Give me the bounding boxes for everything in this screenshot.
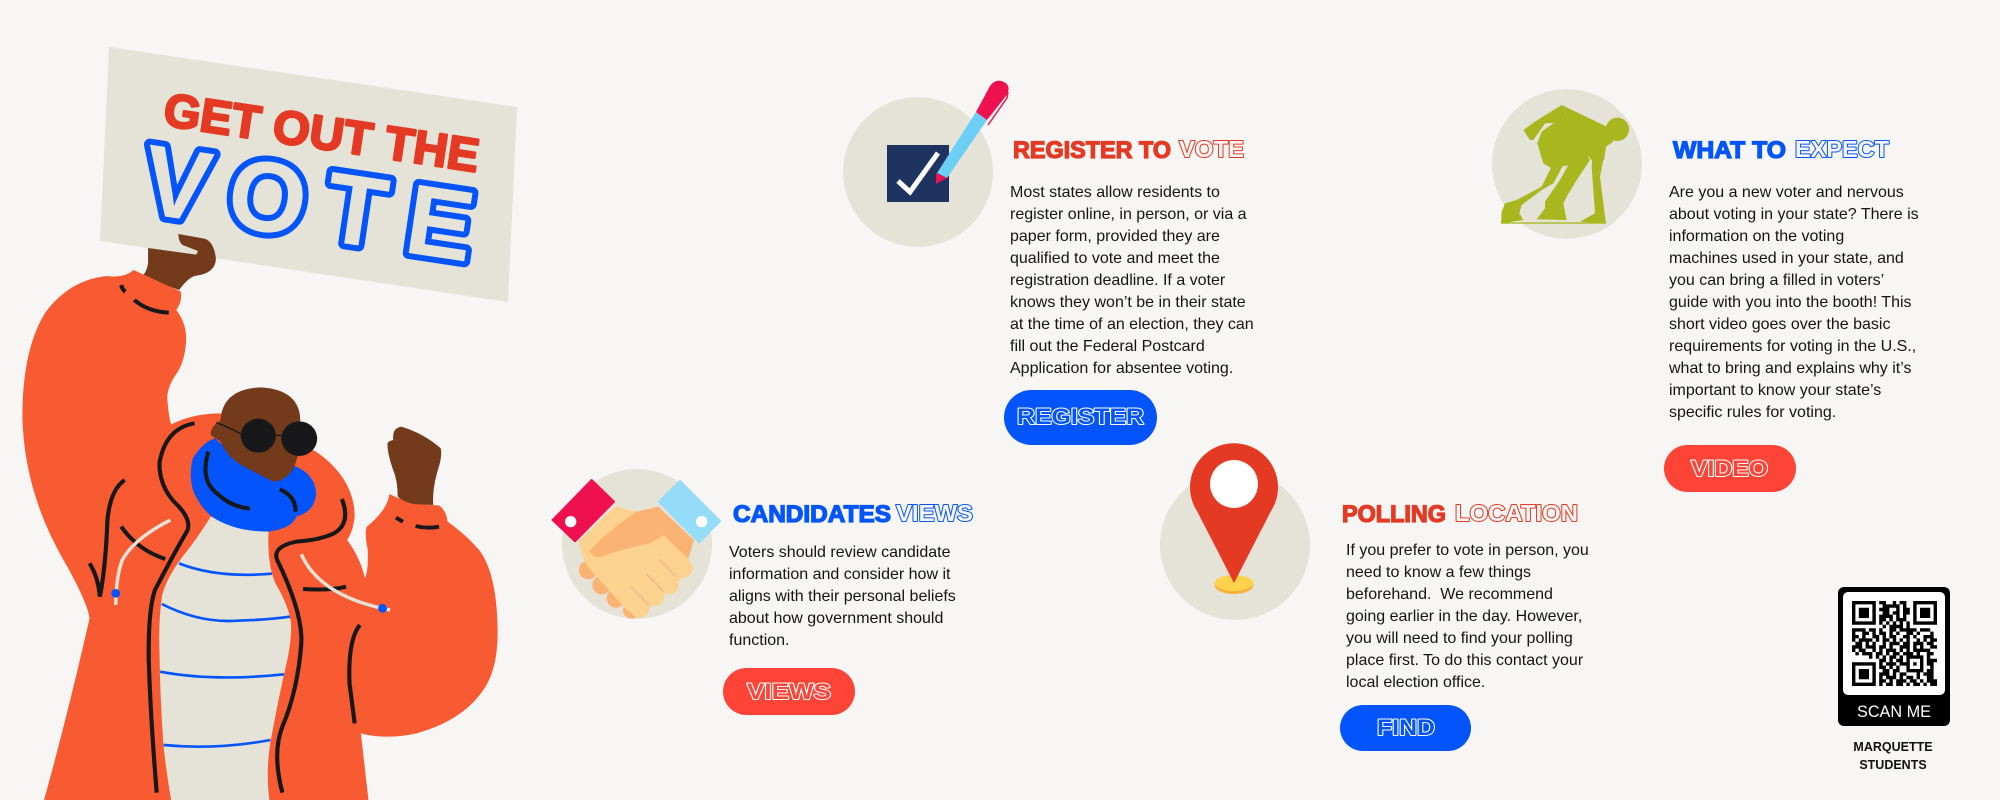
body text: candidates: aligns with their personal beliefs (729, 588, 956, 605)
panel: register to vote (843, 80, 1254, 445)
body text: candidates: function. (729, 632, 789, 649)
button: register (1004, 390, 1157, 445)
body text: register: register online, in person, or via a (1010, 206, 1247, 223)
raised fist (387, 427, 441, 505)
body text: polling: you will need to find your polling (1346, 630, 1573, 647)
heading: register to vote (1013, 136, 1244, 164)
body text: candidates: information and consider how it (729, 566, 950, 583)
QR scan card: SCAN ME (1857, 702, 1931, 721)
body text: expect: Are you a new voter and nervous (1669, 184, 1904, 201)
body text: polling: need to know a few things (1346, 564, 1531, 581)
heading: polling location: LOCATION (1455, 500, 1578, 526)
body text: register: knows they won’t be in their state (1010, 294, 1246, 311)
button: video (1664, 445, 1796, 492)
button: views (723, 668, 855, 715)
button: views: VIEWS (747, 679, 831, 704)
sign text: vote: VOTE (136, 124, 481, 284)
body text: register: Application for absentee voting. (1010, 360, 1233, 377)
button: register: REGISTER (1017, 404, 1144, 429)
body text: register: fill out the Federal Postcard (1010, 338, 1205, 355)
body text: expect: specific rules for voting. (1669, 404, 1836, 421)
hoodie drawstrings (111, 520, 390, 613)
caption: marquette students: STUDENTS (1859, 758, 1927, 772)
heading: candidates views (733, 500, 974, 528)
panel: polling location (1160, 443, 1589, 751)
body text: expect: machines used in your state, and (1669, 250, 1904, 267)
orange coat (22, 270, 498, 800)
sign text: get out the: GET OUT THE (161, 82, 483, 182)
body text: polling: If you prefer to vote in person, you (1346, 542, 1589, 559)
body text: register: qualified to vote and meet the (1010, 250, 1220, 267)
caption: marquette students (1853, 740, 1933, 772)
panel: QR code (1838, 587, 1950, 772)
body text: expect: you can bring a filled in voters’ (1669, 272, 1884, 289)
caption: marquette students: MARQUETTE (1853, 740, 1933, 754)
body text: expect: what to bring and explains why it’s (1669, 360, 1912, 377)
raised hand (141, 234, 216, 290)
button: video: VIDEO (1691, 456, 1768, 481)
blue scarf (191, 438, 316, 532)
heading: what to expect (1672, 136, 1890, 164)
heading: register to vote: VOTE (1179, 136, 1244, 162)
body text: expect (1669, 184, 1919, 421)
heading: candidates views: CANDIDATES (733, 501, 891, 528)
QR scan card (1838, 587, 1950, 726)
body text: register: at the time of an election, they can (1010, 316, 1254, 333)
body text: register: registration deadline. If a voter (1010, 272, 1225, 289)
body text: register (1010, 184, 1254, 377)
coat seams (90, 285, 439, 793)
body text: expect: important to know your state’s (1669, 382, 1881, 399)
body text: expect: about voting in your state? There is (1669, 206, 1919, 223)
heading: what to expect: WHAT TO (1673, 137, 1786, 164)
heading: polling location (1342, 500, 1578, 528)
icon: sprinter at starting line (1492, 89, 1642, 239)
sunglasses (216, 419, 317, 456)
body text: polling: local election office. (1346, 674, 1485, 691)
person figure (22, 234, 498, 800)
body text: candidates: about how government should (729, 610, 943, 627)
body text: polling (1346, 542, 1589, 691)
button: find (1340, 705, 1471, 751)
body text: polling: place first. To do this contact your (1346, 652, 1583, 669)
heading: candidates views: VIEWS (896, 500, 973, 526)
protest sign (100, 47, 517, 302)
body text: expect: guide with you into the booth! This (1669, 294, 1912, 311)
body text: register: Most states allow residents to (1010, 184, 1220, 201)
icon: map pin (1160, 443, 1310, 620)
body text: expect: information on the voting (1669, 228, 1844, 245)
body text: register: paper form, provided they are (1010, 228, 1220, 245)
body text: polling: beforehand. We recommend (1346, 586, 1553, 603)
heading: polling location: POLLING (1342, 501, 1446, 528)
panel: candidates views (552, 469, 974, 715)
icon: handshake (552, 469, 721, 619)
button: find: FIND (1377, 715, 1435, 740)
panel: what to expect (1492, 89, 1919, 492)
heading: what to expect: EXPECT (1795, 136, 1889, 162)
body text: candidates (729, 544, 956, 649)
icon: ballot check and pen (843, 80, 1009, 247)
body text: expect: requirements for voting in the U.S., (1669, 338, 1916, 355)
body text: candidates: Voters should review candidate (729, 544, 950, 561)
heading: register to vote: REGISTER TO (1013, 137, 1171, 164)
head (211, 387, 300, 481)
body text: polling: going earlier in the day. However, (1346, 608, 1582, 625)
body text: expect: short video goes over the basic (1669, 316, 1890, 333)
striped shirt (159, 517, 291, 800)
